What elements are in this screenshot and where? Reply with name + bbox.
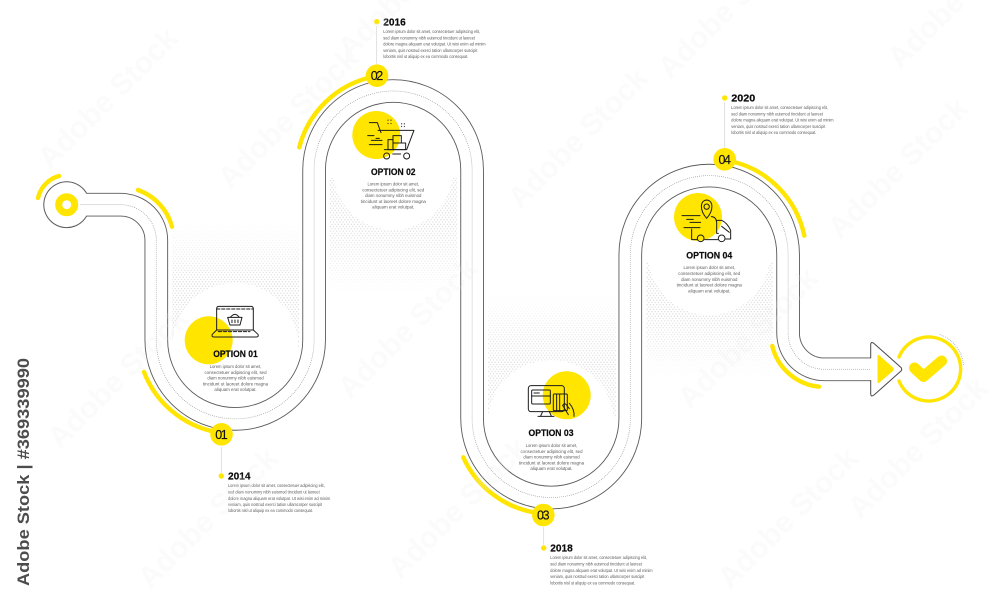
text: option 03 body: aliquam erat volutpat. [530, 466, 573, 471]
text: option 03 body [519, 443, 585, 471]
text: option 02 body: consectetuer adipiscing elit, sed [362, 188, 425, 192]
text: 2016 body: veniam, quis nostrud exerci tation ullamcorper suscipit [383, 48, 478, 53]
watermark: Adobe Stock [502, 62, 655, 215]
marker 03 with 2018 note [532, 504, 653, 586]
watermark: Adobe Stock [822, 92, 975, 245]
text: option 02 body: tincidunt ut laoreet dolore magna [361, 199, 427, 204]
text: 2018 body: Lorem ipsum dolor sit amet, consectetuer adipiscing elit, [550, 555, 647, 560]
text: option 03 body: diam nonummy nibh euismod [523, 454, 580, 460]
panel: option 03 [519, 371, 591, 471]
side stock label: Adobe Stock | #369339990 [14, 358, 33, 586]
icon: laptop basket [185, 306, 258, 364]
marker 03 with 2018 note: 03 [537, 508, 550, 522]
text: option 04 body [677, 265, 743, 294]
text: option 04 body: tincidunt ut laoreet dolore magna [677, 282, 743, 288]
marker 02 with 2016 note: 02 [371, 69, 383, 83]
text: option 01 body: diam nonummy nibh euismod [207, 376, 264, 381]
text: 2014 body: dolore magna aliquam erat volutpat. Ut wisi enim ad minim [228, 496, 331, 501]
text: option 04 body: Lorem ipsum dolor sit amet, [683, 265, 735, 270]
marker 03 with 2018 note: 2018 [550, 544, 573, 554]
marker 01 with 2014 note: 2014 [228, 472, 251, 482]
text: 2020 body: sed diam nonummy nibh euismod tincidunt ut laoreet [731, 112, 824, 116]
text: option 01 body: tincidunt ut laoreet dolore magna [203, 381, 269, 386]
panel: option 03: OPTION 03 [528, 428, 574, 439]
marker 04 with 2020 note [713, 94, 834, 171]
text: 2014 body: veniam, quis nostrud exerci tation ullamcorper suscipit [228, 502, 323, 507]
start marker [38, 176, 75, 213]
text: 2014 body: sed diam nonummy nibh euismod tincidunt ut laoreet [228, 490, 320, 494]
watermark: Adobe Stock [332, 252, 485, 405]
yellow arc option 02 [299, 77, 372, 147]
winding road [43, 91, 876, 498]
text: option 02 body [361, 182, 427, 210]
marker 02 with 2016 note [366, 17, 486, 87]
marker 04 with 2020 note: 04 [718, 153, 731, 167]
check circle [899, 334, 964, 401]
yellow arc option 01 [144, 372, 216, 432]
panel: option 01 [185, 306, 269, 392]
text: option 03 body: Lorem ipsum dolor sit amet, [526, 443, 577, 448]
halftone dot panels [172, 110, 773, 486]
icon: delivery truck and pin [674, 193, 731, 242]
watermark: Adobe Stock [672, 262, 825, 415]
text: option 01 body: Lorem ipsum dolor sit amet, [210, 364, 261, 369]
text: 2020 body: lobortis nisl ut aliquip ex ea commodo consequat. [731, 130, 816, 135]
panel: option 01: OPTION 01 [213, 349, 258, 360]
watermark: Adobe Stock [382, 432, 535, 585]
watermark: Adobe Stock [32, 22, 185, 175]
text: option 01 body: consectetuer adipiscing elit, sed [204, 370, 267, 375]
text: 2018 body [550, 555, 653, 586]
text: 2016 body: lobortis nisl ut aliquip ex ea commodo consequat. [383, 54, 468, 59]
text: option 03 body: tincidunt ut laoreet dolore magna [519, 460, 585, 466]
text: 2018 body: veniam, quis nostrud exerci tation ullamcorper suscipit [550, 574, 645, 579]
yellow corner arc [138, 190, 172, 227]
yellow arc option 04 [730, 161, 804, 236]
panel: option 02: OPTION 02 [371, 167, 416, 178]
text: option 03 body: consectetuer adipiscing elit, sed [520, 449, 583, 454]
yellow arc final corner [772, 346, 819, 387]
icon: shopping cart [352, 111, 414, 159]
marker 01 with 2014 note: 01 [215, 428, 228, 442]
panel: option 04 [674, 193, 743, 294]
watermark: Adobe Stock [42, 302, 195, 455]
text: option 01 body [203, 364, 269, 392]
text: 2018 body: lobortis nisl ut aliquip ex ea commodo consequat. [550, 580, 635, 586]
text: 2018 body: dolore magna aliquam erat volutpat. Ut wisi enim ad minim [550, 568, 653, 573]
icon: monitor card payment [528, 371, 591, 419]
text: option 02 body: aliquam erat volutpat. [372, 204, 414, 210]
text: option 01 body: aliquam erat volutpat. [214, 387, 257, 392]
text: option 04 body: aliquam erat volutpat. [688, 288, 730, 294]
marker 01 with 2014 note [210, 423, 331, 513]
marker 02 with 2016 note: 2016 [383, 17, 406, 28]
text: 2020 body [731, 105, 834, 135]
text: 2016 body: Lorem ipsum dolor sit amet, consectetuer adipiscing elit, [383, 29, 480, 34]
watermark: Adobe Stock [132, 442, 285, 595]
text: 2014 body: Lorem ipsum dolor sit amet, consectetuer adipiscing elit, [228, 483, 325, 488]
text: option 04 body: diam nonummy nibh euismod [681, 277, 738, 282]
text: 2020 body: veniam, quis nostrud exerci tation ullamcorper suscipit [731, 124, 826, 129]
text: 2016 body: sed diam nonummy nibh euismod tincidunt ut laoreet [383, 36, 476, 40]
text: option 02 body: Lorem ipsum dolor sit amet, [367, 182, 419, 186]
text: 2016 body [383, 29, 486, 59]
arrow head [871, 343, 902, 396]
text: 2020 body: dolore magna aliquam erat volutpat. Ut wisi enim ad minim [731, 118, 834, 122]
text: 2014 body: lobortis nisl ut aliquip ex ea commodo consequat. [228, 508, 313, 513]
text: option 04 body: consectetuer adipiscing elit, sed [678, 271, 741, 276]
text: 2016 body: dolore magna aliquam erat volutpat. Ut wisi enim ad minim [383, 42, 486, 46]
text: 2014 body [228, 483, 331, 513]
text: option 02 body: diam nonummy nibh euismod [365, 193, 422, 198]
watermark: Adobe Stock [842, 372, 995, 525]
text: 2018 body: sed diam nonummy nibh euismod tincidunt ut laoreet [550, 562, 643, 566]
watermark: Adobe Stock [212, 42, 365, 195]
watermark: Adobe Stock [712, 442, 865, 595]
panel: option 02 [352, 111, 427, 210]
text: 2020 body: Lorem ipsum dolor sit amet, consectetuer adipiscing elit, [731, 105, 828, 110]
marker 04 with 2020 note: 2020 [731, 94, 756, 104]
panel: option 04: OPTION 04 [686, 250, 733, 262]
yellow arc option 03 [463, 457, 538, 513]
